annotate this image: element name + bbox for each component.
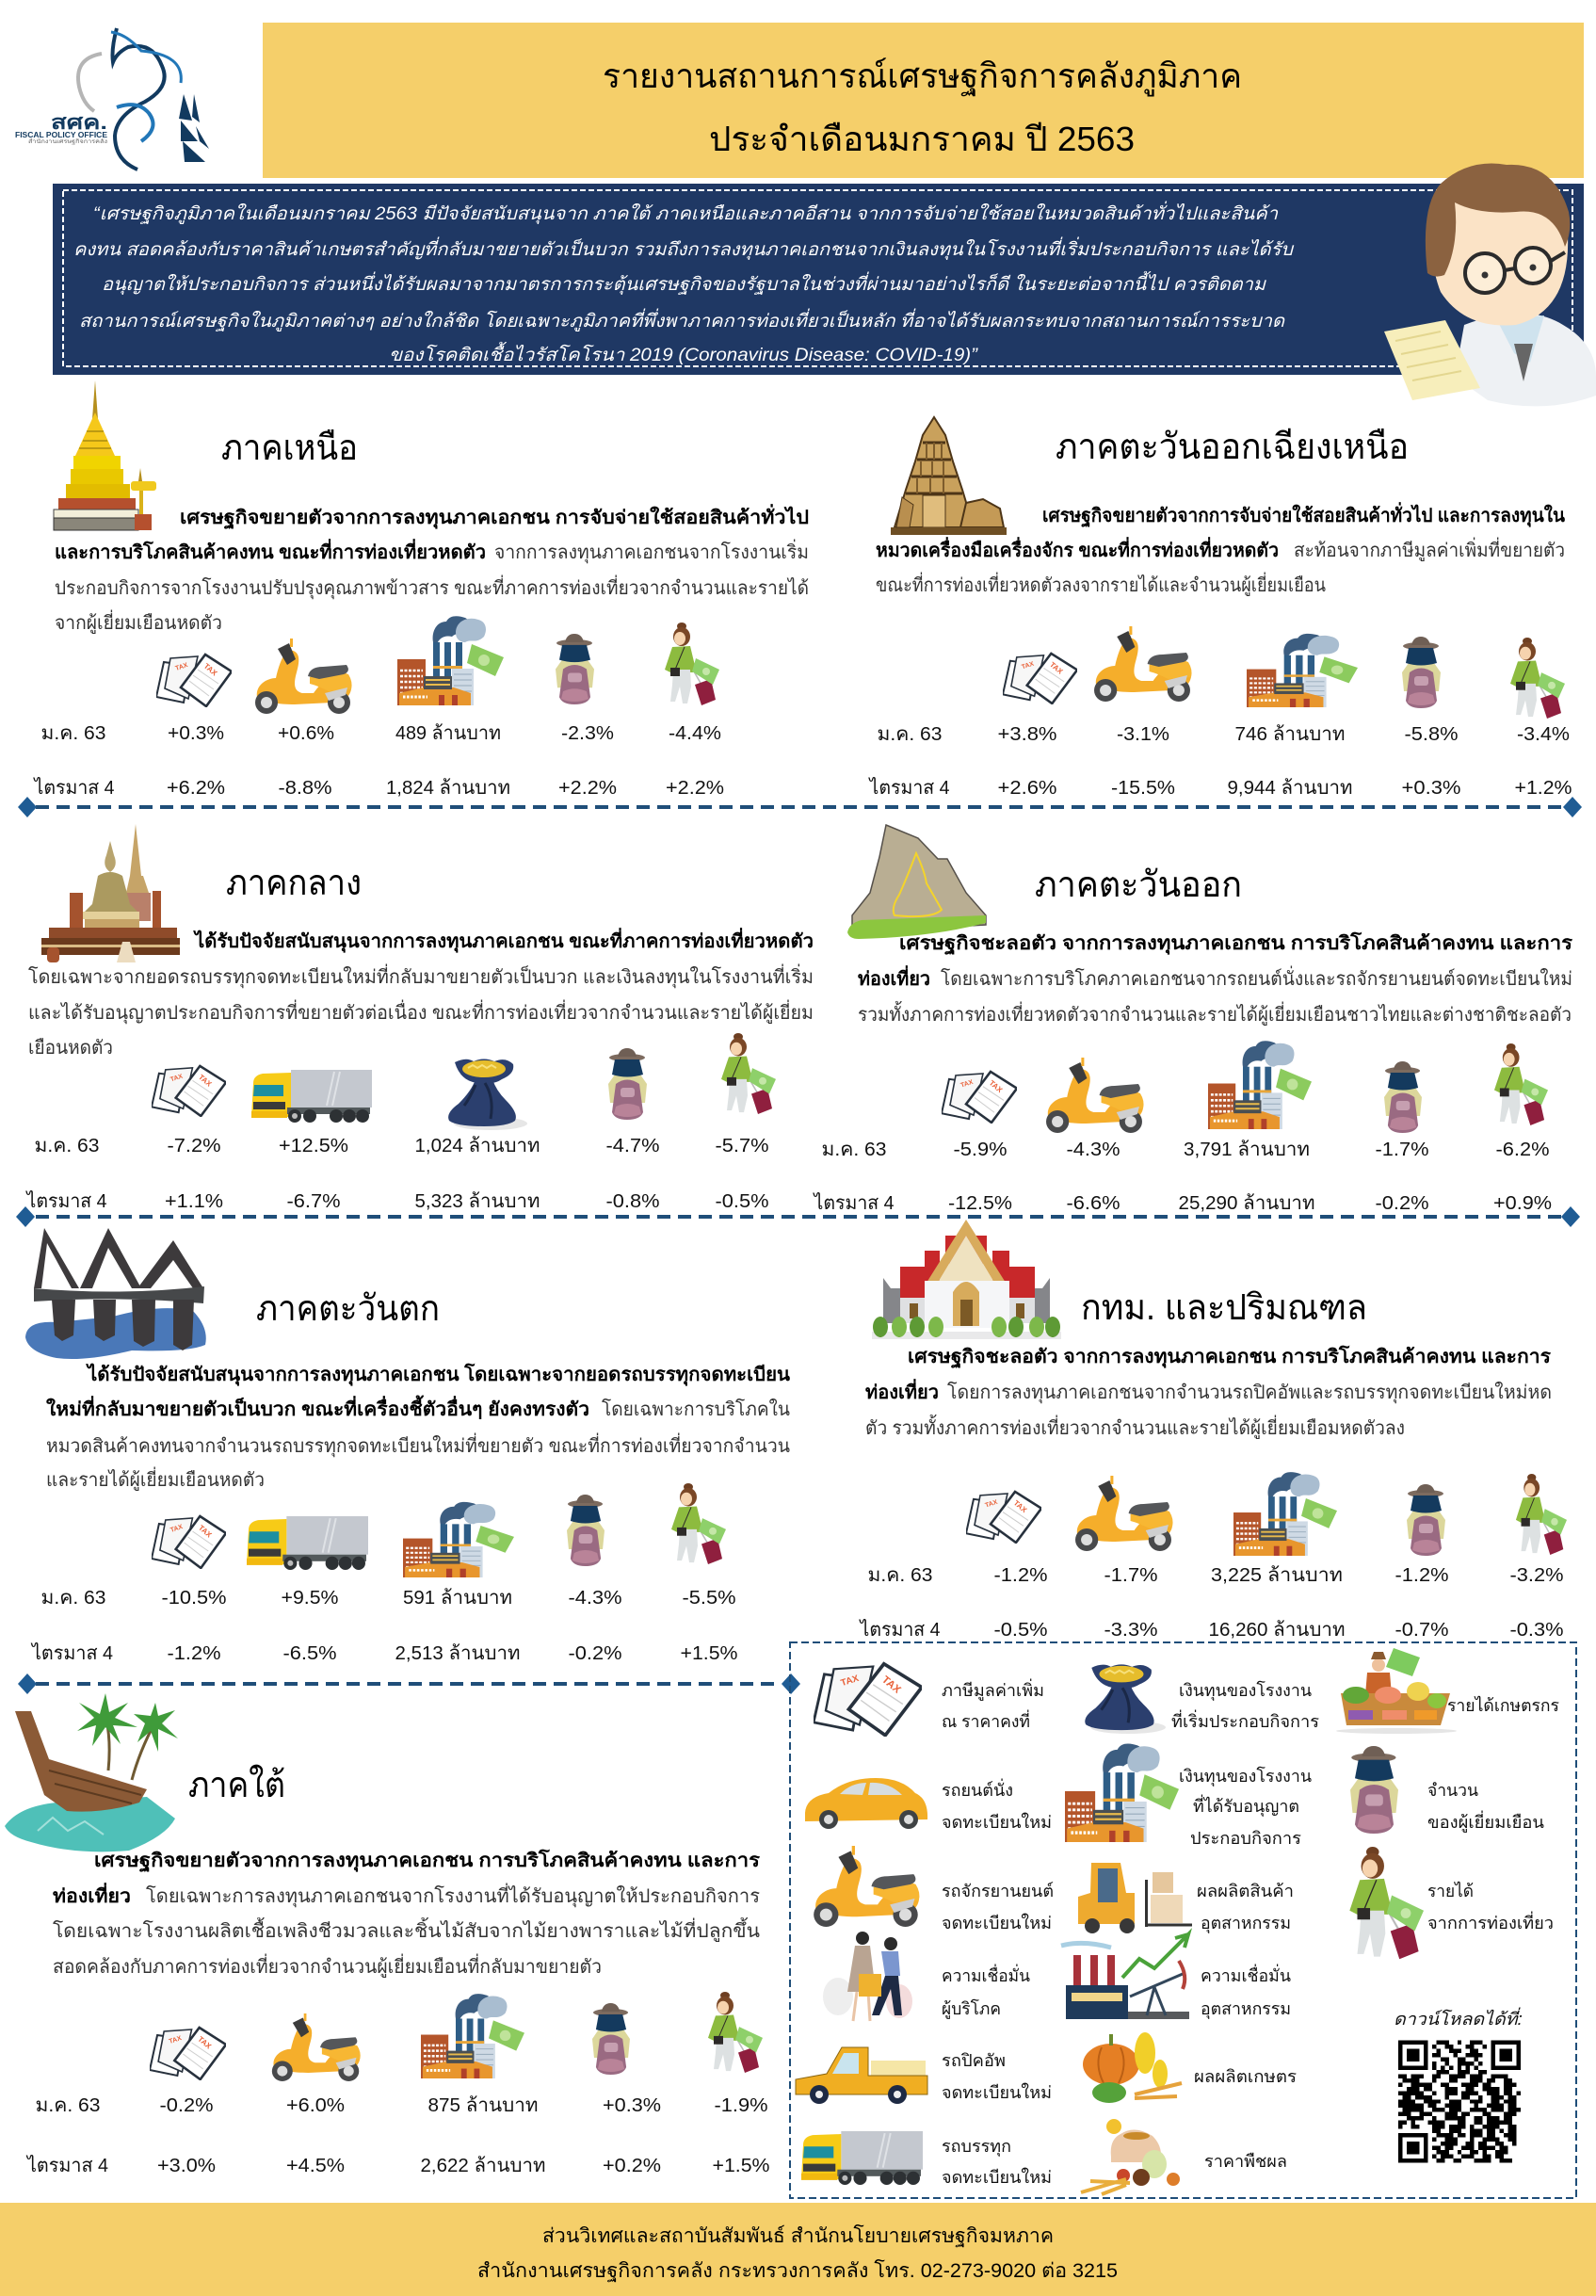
data row: January: ม.ค. 63 xyxy=(41,723,105,744)
logo: fiscal policy office: สศค. xyxy=(51,112,107,134)
legend item: new factory capital: ที่เริ่มประกอบกิจการ xyxy=(1171,1709,1319,1731)
data row: January: +0.6% xyxy=(278,723,334,744)
legend item: agricultural output: ผลผลิตเกษตร xyxy=(1194,2067,1297,2086)
legend item: visitor count: ของผู้เยี่ยมเยือน xyxy=(1427,1810,1544,1833)
body text: จากการลงทุนภาคเอกชนจากโรงงานเริ่ม xyxy=(494,539,809,564)
data row: January: ม.ค. 63 xyxy=(41,1588,105,1609)
data row: Q4: ไตรมาส 4 xyxy=(859,1619,940,1641)
data row: January: -1.7% xyxy=(1104,1565,1158,1586)
data row: January: -5.5% xyxy=(682,1588,736,1609)
data row: January: -1.9% xyxy=(714,2095,768,2116)
data row: January: 489 ล้านบาท xyxy=(395,723,501,744)
data row: Q4: +2.2% xyxy=(666,778,724,799)
data row: January: -5.7% xyxy=(716,1136,769,1156)
dashed section dividers xyxy=(16,797,1582,1694)
data row: Q4: +1.5% xyxy=(680,1643,738,1664)
body text xyxy=(55,503,809,635)
title banner: ประจำเดือนมกราคม ปี 2563 xyxy=(709,120,1135,158)
data row: Q4: ไตรมาส 4 xyxy=(25,1190,107,1212)
data row: January: -5.9% xyxy=(953,1140,1008,1160)
body text: รวมทั้งภาคการท่องเที่ยวหดตัวจากจำนวนและรายได้ผู้เยี่ยมเยือนชาวไทยและต่างชาติชะลอตัว xyxy=(858,1001,1572,1027)
body text: เศรษฐกิจชะลอตัว จากการลงทุนภาคเอกชน การบริโภคสินค้าคงทน และการ xyxy=(899,931,1572,956)
body text: ได้รับปัจจัยสนับสนุนจากการลงทุนภาคเอกชน ขณะที่ภาคการท่องเที่ยวหดตัว xyxy=(193,927,814,953)
data row: January: -3.2% xyxy=(1510,1565,1564,1586)
data row: Q4: +3.0% xyxy=(157,2156,216,2176)
body text: สอดคล้องกับภาคการท่องเที่ยวจากจำนวนผู้เยี่ยมเยือนที่กลับมาขยายตัว xyxy=(53,1953,602,1979)
legend item: VAT: ภาษีมูลค่าเพิ่ม xyxy=(942,1678,1044,1701)
data row: January: -7.2% xyxy=(168,1136,221,1156)
legend item: industrial output: ผลผลิตสินค้า xyxy=(1197,1882,1294,1900)
heading: ภาคกลาง xyxy=(226,864,362,903)
legend item: industrial output: อุตสาหกรรม xyxy=(1201,1914,1291,1933)
data row: Q4: 2,622 ล้านบาท xyxy=(420,2156,546,2176)
data row: Q4 xyxy=(33,777,724,799)
data row: Q4: -6.7% xyxy=(286,1191,341,1212)
data row: January xyxy=(821,1140,1550,1160)
body text: โดยเฉพาะการบริโภคใน xyxy=(602,1399,790,1420)
legend item: agricultural output xyxy=(1083,2032,1297,2103)
summary quote panel: สถานการณ์เศรษฐกิจในภูมิภาคต่างๆ อย่างใกล้ชิด โดยเฉพาะภูมิภาคที่พึ่งพาภาคการท่องเที่ยวเป็นหลัก ที่อาจได้รับผลกระทบจากสถานการณ์การระบาด xyxy=(79,308,1286,331)
data row: Q4 xyxy=(868,777,1572,799)
body text: โดยเฉพาะโรงงานผลิตเชื้อเพลิงชีวมวลและชิ้นไม้สับจากไม้ยางพาราและไม้ที่ปลูกขึ้น xyxy=(53,1917,760,1943)
legend item: tourism income xyxy=(1349,1847,1554,1959)
data row: Q4: -6.6% xyxy=(1066,1193,1120,1214)
data row: Q4 xyxy=(813,1192,1552,1214)
data row: Q4: -15.5% xyxy=(1111,778,1175,799)
data row: January: -6.2% xyxy=(1495,1140,1550,1160)
icon row xyxy=(152,1033,776,1130)
heading: ภาคเหนือ xyxy=(221,428,358,468)
data row: Q4: -0.3% xyxy=(1510,1620,1564,1641)
icon row xyxy=(150,1992,763,2081)
legend item: motorcycle: จดทะเบียนใหม่ xyxy=(942,1913,1052,1932)
legend item: pickup: รถปิคอัพ xyxy=(942,2051,1006,2070)
data row: Q4: +2.2% xyxy=(558,778,617,799)
data row: Q4: +0.9% xyxy=(1493,1193,1552,1214)
data row: Q4: 2,513 ล้านบาท xyxy=(395,1643,520,1664)
data row: Q4 xyxy=(25,2155,770,2176)
data row: Q4: 9,944 ล้านบาท xyxy=(1228,778,1352,799)
icon: Khmer prang temple xyxy=(891,417,1007,535)
legend item: motorcycle: รถจักรยานยนต์ xyxy=(942,1882,1054,1900)
data row: January: -4.3% xyxy=(1066,1140,1120,1160)
download label: ดาวน์โหลดได้ที่: xyxy=(1394,2007,1523,2029)
legend item: pickup xyxy=(796,2047,1052,2104)
legend item: industrial confidence: อุตสาหกรรม xyxy=(1201,1999,1291,2019)
data row: January: ม.ค. 63 xyxy=(36,2095,100,2116)
data row: January: -1.2% xyxy=(1395,1565,1449,1586)
data row: Q4 xyxy=(30,1642,738,1664)
icon row xyxy=(966,1472,1567,1556)
body text: ท่องเที่ยว xyxy=(858,964,930,990)
QR code xyxy=(1398,2040,1521,2162)
legend item: consumer confidence: ความเชื่อมั่น xyxy=(942,1964,1030,1985)
data row: Q4: +2.6% xyxy=(998,778,1057,799)
body text: ได้รับปัจจัยสนับสนุนจากการลงทุนภาคเอกชน โดยเฉพาะจากยอดรถบรรทุกจดทะเบียน xyxy=(86,1363,790,1386)
legend item: passenger car xyxy=(805,1778,1052,1832)
data row: January: 591 ล้านบาท xyxy=(403,1588,512,1609)
legend item: tourism income: จากการท่องเที่ยว xyxy=(1427,1911,1554,1932)
panel: northeastern region xyxy=(868,417,1572,799)
logo: fiscal policy office: สำนักงานเศรษฐกิจการคลัง xyxy=(28,138,107,145)
legend item: consumer confidence: ผู้บริโภค xyxy=(942,1998,1001,2019)
footer banner: ส่วนวิเทศและสถาบันสัมพันธ์ สำนักนโยบายเศรษฐกิจมหภาค xyxy=(542,2224,1054,2247)
body text: สะท้อนจากภาษีมูลค่าเพิ่มที่ขยายตัว xyxy=(1294,537,1565,562)
data row: January: -4.4% xyxy=(669,723,721,744)
data row: January: -1.2% xyxy=(994,1565,1048,1586)
panel: legend xyxy=(790,1642,1576,2198)
data row: January xyxy=(34,1136,769,1156)
legend item: tourism income: รายได้ xyxy=(1427,1881,1474,1900)
body text: ท่องเที่ยว xyxy=(865,1378,939,1403)
icon: longtail boat, palms and sea xyxy=(5,1693,178,1851)
legend item: industrial confidence: ความเชื่อมั่น xyxy=(1201,1964,1291,1985)
data row: Q4: -0.7% xyxy=(1395,1620,1449,1641)
data row: Q4: +0.3% xyxy=(1401,778,1461,799)
summary quote panel: อนุญาตให้ประกอบกิจการ ส่วนหนึ่งได้รับผลมาจากมาตรการกระตุ้นเศรษฐกิจของรัฐบาลในช่วงที่ผ่านมาอย่างไรก็ดี ในระยะต่อจากนี้ไป ควรติดตาม xyxy=(102,270,1267,295)
data row: January xyxy=(41,1588,736,1609)
data row: January: -3.4% xyxy=(1517,724,1570,745)
body text: หมวดสินค้าคงทนจากจำนวนรถบรรทุกจดทะเบียนใหม่ที่ขยายตัว ขณะที่การท่องเที่ยวจากจำนวน xyxy=(46,1432,790,1458)
heading: กทม. และปริมณฑล xyxy=(1081,1288,1367,1328)
footer banner xyxy=(0,2203,1596,2296)
body text: เศรษฐกิจชะลอตัว จากการลงทุนภาคเอกชน การบริโภคสินค้าคงทน และการ xyxy=(908,1345,1551,1369)
summary quote panel xyxy=(53,184,1584,375)
legend item: licensed factory capital: เงินทุนของโรงงาน xyxy=(1179,1766,1312,1787)
data row: Q4: ไตรมาส 4 xyxy=(33,777,115,799)
body text: โดยเฉพาะจากยอดรถบรรทุกจดทะเบียนใหม่ที่กลับมาขยายตัวเป็นบวก และเงินลงทุนในโรงงานที่เริ่ม xyxy=(28,963,814,989)
data row: January: +9.5% xyxy=(281,1588,339,1609)
data row: Q4: +6.2% xyxy=(167,778,225,799)
data row: January: 3,791 ล้านบาท xyxy=(1184,1140,1310,1160)
body text: โดยเฉพาะการบริโภคภาคเอกชนจากรถยนต์นั่งและรถจักรยานยนต์จดทะเบียนใหม่ xyxy=(941,965,1572,990)
body text xyxy=(28,927,814,1059)
data row: Q4: +1.5% xyxy=(712,2156,770,2176)
body text: ท่องเที่ยว xyxy=(53,1882,131,1907)
legend item: passenger car: จดทะเบียนใหม่ xyxy=(942,1812,1052,1832)
legend item: new factory capital: เงินทุนของโรงงาน xyxy=(1179,1680,1312,1701)
heading: ภาคใต้ xyxy=(188,1765,285,1805)
legend item: truck xyxy=(801,2131,1052,2187)
data row: Q4: -0.8% xyxy=(606,1191,660,1212)
icon row xyxy=(152,1483,726,1577)
data row: January: -2.3% xyxy=(561,723,614,744)
data row: Q4: ไตรมาส 4 xyxy=(25,2155,108,2176)
icon: seated Buddha ruins xyxy=(41,824,180,962)
footer banner: สำนักงานเศรษฐกิจการคลัง กระทรวงการคลัง โทร. 02-273-9020 ต่อ 3215 xyxy=(477,2259,1118,2282)
body text: เศรษฐกิจขยายตัวจากการลงทุนภาคเอกชน การบริโภคสินค้าคงทน และการ xyxy=(94,1849,760,1873)
heading: ภาคตะวันออกเฉียงเหนือ xyxy=(1056,428,1409,467)
body text: เศรษฐกิจขยายตัวจากการจับจ่ายใช้สอยสินค้าทั่วไป และการลงทุนใน xyxy=(1042,501,1565,528)
heading: ภาคตะวันตก xyxy=(256,1289,440,1329)
data row: January: +3.8% xyxy=(998,724,1057,745)
title banner xyxy=(263,23,1584,178)
data row: Q4: +0.2% xyxy=(603,2156,661,2176)
legend item: licensed factory capital: ประกอบกิจการ xyxy=(1190,1829,1301,1848)
data row: January: ม.ค. 63 xyxy=(34,1136,100,1156)
data row: January: +12.5% xyxy=(279,1136,348,1156)
title banner: รายงานสถานการณ์เศรษฐกิจการคลังภูมิภาค xyxy=(603,57,1242,97)
data row: January: -3.1% xyxy=(1117,724,1169,745)
legend item: VAT xyxy=(814,1664,1044,1736)
body text: และรายได้ผู้เยี่ยมเยือนหดตัว xyxy=(46,1466,265,1492)
data row: Q4: 5,323 ล้านบาท xyxy=(414,1191,540,1212)
legend item: crop prices xyxy=(1081,2119,1287,2194)
heading: ภาคตะวันออก xyxy=(1035,865,1242,905)
body text: จากผู้เยี่ยมเยือนหดตัว xyxy=(55,609,222,635)
icon: marble temple xyxy=(872,1220,1061,1339)
summary quote panel: ของโรคติดเชื้อไวรัสโคโรนา 2019 (Coronavirus Disease: COVID-19)” xyxy=(389,341,979,365)
body text: ตัว รวมทั้งภาคการท่องเที่ยวจากจำนวนและรายได้ผู้เยี่ยมเยือมหดตัวลง xyxy=(865,1415,1405,1440)
data row: Q4: -12.5% xyxy=(948,1193,1012,1214)
data row: January: +0.3% xyxy=(168,723,224,744)
body text xyxy=(865,1345,1552,1440)
legend item: VAT: ณ ราคาคงที่ xyxy=(942,1709,1030,1731)
legend item: industrial output xyxy=(1078,1863,1294,1933)
data row: Q4: -3.3% xyxy=(1104,1620,1158,1641)
icon row xyxy=(1003,626,1565,719)
data row: January xyxy=(36,2095,768,2116)
data row: Q4: +4.5% xyxy=(286,2156,345,2176)
data row: January: -1.7% xyxy=(1375,1140,1429,1160)
data row: January: 875 ล้านบาท xyxy=(427,2095,539,2116)
icon: rock with Buddha carving xyxy=(847,825,986,939)
body text: เยือนหดตัว xyxy=(28,1038,113,1059)
data row: January: ม.ค. 63 xyxy=(868,1565,932,1586)
data row: Q4: ไตรมาส 4 xyxy=(868,777,949,799)
legend item: industrial confidence xyxy=(1061,1934,1291,2019)
legend item: truck: รถบรรทุก xyxy=(942,2137,1011,2157)
data row: January: -4.7% xyxy=(606,1136,660,1156)
data row: Q4: ไตรมาส 4 xyxy=(813,1192,895,1214)
summary quote panel: คงทน สอดคล้องกับราคาสินค้าเกษตรสำคัญที่กลับมาขยายตัวเป็นบวก รวมถึงการลงทุนภาคเอกชนจากเงินลงทุนในโรงงานที่เริ่มประกอบกิจการ และได้รับ xyxy=(73,236,1295,260)
data row: Q4: -1.2% xyxy=(168,1643,221,1664)
legend item: passenger car: รถยนต์นั่ง xyxy=(942,1778,1013,1800)
body text: โดยการลงทุนภาคเอกชนจากจำนวนรถปิคอัพและรถบรรทุกจดทะเบียนใหม่หด xyxy=(947,1382,1552,1404)
legend item: licensed factory capital: ที่ได้รับอนุญาต xyxy=(1193,1794,1299,1817)
icon: golden pagoda xyxy=(54,380,156,530)
data row: January: +0.3% xyxy=(603,2095,661,2116)
legend item: farmer income: รายได้เกษตรกร xyxy=(1447,1695,1559,1715)
data row: January: 746 ล้านบาท xyxy=(1235,724,1345,745)
icon row xyxy=(942,1041,1548,1133)
data row: January xyxy=(41,723,721,744)
legend item: new factory capital xyxy=(1085,1664,1319,1734)
data row: Q4: ไตรมาส 4 xyxy=(30,1642,113,1664)
icon: wooden bridge over water xyxy=(25,1228,206,1359)
data row: Q4: -0.2% xyxy=(1375,1193,1429,1214)
data row: Q4 xyxy=(25,1190,769,1212)
data row: Q4 xyxy=(859,1619,1564,1641)
data row: January: 3,225 ล้านบาท xyxy=(1211,1565,1343,1586)
panel: Bangkok and vicinity xyxy=(859,1220,1567,1641)
data row: January: -4.3% xyxy=(569,1588,622,1609)
data row: January xyxy=(868,1565,1564,1586)
legend item: pickup: จดทะเบียนใหม่ xyxy=(942,2082,1052,2102)
legend item: consumer confidence xyxy=(823,1932,1030,2021)
data row: January: -0.2% xyxy=(160,2095,214,2116)
panel: central region xyxy=(25,824,814,1212)
data row: January: 1,024 ล้านบาท xyxy=(414,1136,540,1156)
icon row xyxy=(156,616,719,714)
legend item: licensed factory capital xyxy=(1065,1743,1312,1848)
summary quote panel: “เศรษฐกิจภูมิภาคในเดือนมกราคม 2563 มีปัจจัยสนับสนุนจาก ภาคใต้ ภาคเหนือและภาคอีสาน จากการจับจ่ายใช้สอยในหมวดสินค้าทั่วไปและสินค้า xyxy=(93,201,1279,224)
body text xyxy=(53,1849,760,1979)
panel: western region xyxy=(25,1228,790,1664)
body text: เศรษฐกิจขยายตัวจากการลงทุนภาคเอกชน การจับจ่ายใช้สอยสินค้าทั่วไป xyxy=(180,503,809,530)
data row: Q4: -8.8% xyxy=(279,778,332,799)
panel: northern region xyxy=(33,380,809,799)
data row: Q4: -6.5% xyxy=(282,1643,337,1664)
body text xyxy=(46,1363,790,1492)
body text: ใหม่ที่กลับมาขยายตัวเป็นบวก ขณะที่เครื่องชี้ตัวอื่นๆ ยังคงทรงตัว xyxy=(46,1395,589,1420)
data row: Q4: -0.5% xyxy=(994,1620,1048,1641)
panel: eastern region xyxy=(813,825,1572,1214)
body text: และได้รับอนุญาตประกอบกิจการที่ขยายตัวต่อเนื่อง ขณะที่การท่องเที่ยวจากจำนวนและรายได้ผู้เยี่ยม xyxy=(28,999,814,1025)
panel: southern region xyxy=(5,1693,770,2176)
body text: และการบริโภคสินค้าคงทน ขณะที่การท่องเที่ยวหดตัว xyxy=(55,538,486,563)
data row: Q4: 1,824 ล้านบาท xyxy=(386,778,510,799)
legend item: visitor count xyxy=(1350,1746,1544,1834)
data row: Q4: 16,260 ล้านบาท xyxy=(1209,1620,1345,1641)
logo: fiscal policy office: FISCAL POLICY OFFICE xyxy=(15,131,108,139)
data row: January: -10.5% xyxy=(162,1588,227,1609)
data row: January: -5.8% xyxy=(1405,724,1459,745)
data row: January xyxy=(878,724,1570,745)
data row: Q4: -0.2% xyxy=(569,1643,622,1664)
legend item: farmer income xyxy=(1336,1648,1559,1734)
body text: ขณะที่การท่องเที่ยวหดตัวลงจากรายได้และจำนวนผู้เยี่ยมเยือน xyxy=(876,572,1326,597)
logo: fiscal policy office xyxy=(15,28,209,170)
body text: หมวดเครื่องมือเครื่องจักร ขณะที่การท่องเที่ยวหดตัว xyxy=(876,536,1279,561)
data row: Q4: +1.2% xyxy=(1514,778,1572,799)
icon: doctor illustration xyxy=(1384,164,1596,406)
legend item: crop prices: ราคาพืชผล xyxy=(1204,2152,1287,2171)
body text: ประกอบกิจการจากโรงงานปรับปรุงคุณภาพข้าวสาร ขณะที่ภาคการท่องเที่ยวจากจำนวนและรายได้ xyxy=(55,574,809,600)
data row: January: +6.0% xyxy=(286,2095,345,2116)
legend item: truck: จดทะเบียนใหม่ xyxy=(942,2167,1052,2187)
legend item: motorcycle xyxy=(814,1846,1054,1932)
legend item: visitor count: จำนวน xyxy=(1427,1781,1478,1800)
body text: โดยเฉพาะการลงทุนภาคเอกชนจากโรงงานที่ได้รับอนุญาตให้ประกอบกิจการ xyxy=(146,1883,760,1908)
data row: Q4: -0.5% xyxy=(716,1191,769,1212)
data row: Q4: 25,290 ล้านบาท xyxy=(1179,1193,1314,1214)
data row: January: ม.ค. 63 xyxy=(821,1140,887,1160)
data row: Q4: +1.1% xyxy=(165,1191,223,1212)
data row: January: ม.ค. 63 xyxy=(878,724,942,745)
body text xyxy=(876,501,1565,597)
body text xyxy=(858,931,1572,1027)
